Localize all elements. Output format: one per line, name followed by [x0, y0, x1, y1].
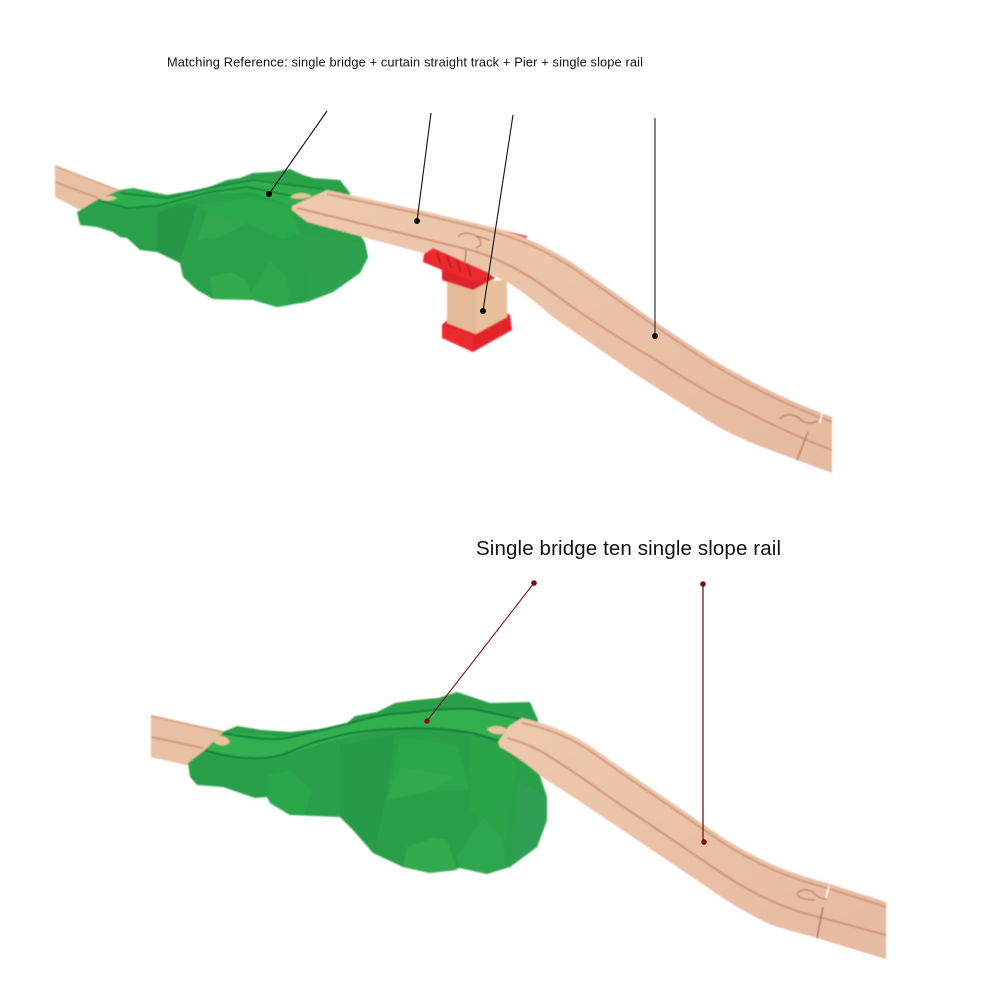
scene: top track assembly: [55, 165, 832, 473]
leader lines: top scene: [266, 111, 658, 339]
red pier top clip: [423, 248, 495, 290]
scene: bottom track assembly: [151, 692, 886, 959]
leader: single bridge: [266, 111, 327, 197]
track joints: [458, 233, 818, 423]
green rock bridge: [77, 169, 368, 307]
leader: curtain straight track: [414, 113, 431, 224]
left track stub: [151, 715, 225, 766]
track joint: [797, 890, 827, 900]
green rock bridge: [188, 692, 547, 874]
red pier base: [442, 313, 512, 352]
leader: single slope rail: [700, 581, 707, 845]
wooden pier block: [447, 280, 507, 334]
leader: pier: [480, 115, 513, 314]
leader lines: bottom scene: [424, 580, 707, 845]
left track stub: [55, 165, 122, 212]
single slope rail: [498, 718, 886, 959]
heading: matching reference: Matching Reference: single bridge + curtain straight track + Pier + single slope rail: [167, 54, 643, 70]
curtain straight track and single slope rail: [292, 190, 832, 473]
leader: single slope rail: [652, 118, 658, 339]
pink rear pier clip: [482, 225, 527, 243]
leader: single bridge: [424, 580, 537, 724]
pier: [423, 248, 512, 352]
heading: single bridge and slope rail: Single bridge ten single slope rail: [476, 537, 781, 560]
